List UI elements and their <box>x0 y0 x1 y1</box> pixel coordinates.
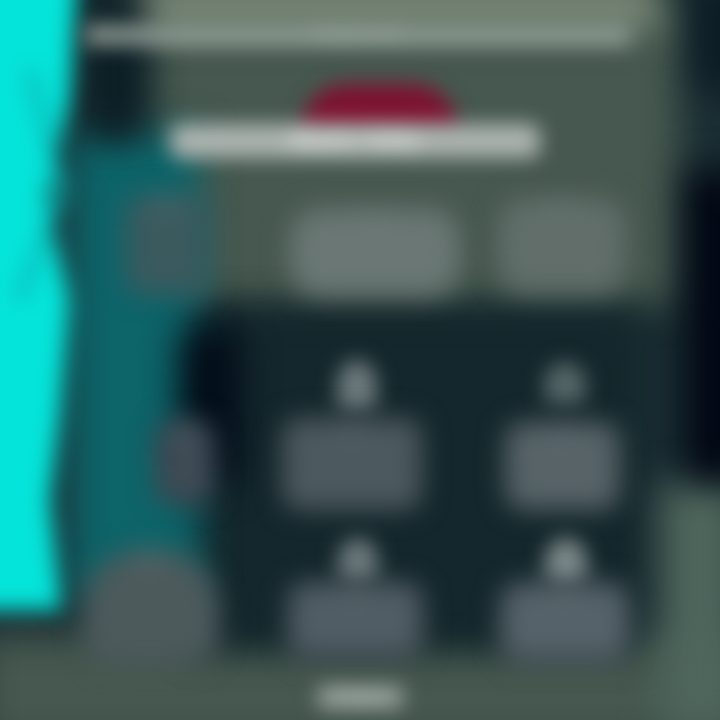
icon: row 2 right <box>544 362 586 404</box>
title: Main title <box>290 124 420 157</box>
panel: right dark edge <box>685 170 720 480</box>
background: dark center panel <box>190 310 640 650</box>
card: row 1 right <box>498 198 626 293</box>
icon: red dome <box>302 84 457 134</box>
footer text: Footer <box>340 689 381 705</box>
panel: top right dark corner <box>695 0 720 90</box>
icon: row 2 center <box>337 360 377 410</box>
background: top olive strip <box>130 0 660 30</box>
panel: teal left wash <box>70 130 200 600</box>
icon: row 3 right <box>545 538 587 584</box>
card: row 3 right <box>500 582 630 662</box>
card: row 1 center <box>290 208 460 296</box>
heading: top strip text: Header text <box>314 26 401 43</box>
card: row 3 left <box>82 550 220 665</box>
panel: dark shape beside cards <box>180 320 240 490</box>
background: lower green band <box>0 635 720 720</box>
card: row 2 left: Item <box>172 421 198 436</box>
background: right green column <box>660 480 720 720</box>
card: row 1 right: Item <box>549 199 575 214</box>
card: row 2 left <box>155 420 215 505</box>
footer text <box>318 686 403 708</box>
heading: top strip text <box>85 25 630 45</box>
card: row 2 right <box>505 422 620 510</box>
card: row 1 left <box>125 195 210 295</box>
panel: dark upper left column <box>90 0 140 140</box>
card: row 2 right: Item <box>550 423 575 438</box>
card: row 1 left: Item <box>155 196 180 211</box>
background: upper grey-green panel <box>150 0 680 305</box>
title <box>170 124 540 158</box>
card: row 2 center <box>282 418 422 510</box>
icon: row 3 center <box>338 538 378 582</box>
card: row 1 center: Item <box>362 209 388 224</box>
card: row 3 left: Item <box>138 551 164 566</box>
card: row 3 center: Item <box>343 583 368 598</box>
card: row 3 center <box>288 582 423 658</box>
card: row 2 center: Item <box>339 419 365 434</box>
card: row 3 right: Item <box>552 583 578 598</box>
panel: bright cyan left band <box>0 0 93 627</box>
